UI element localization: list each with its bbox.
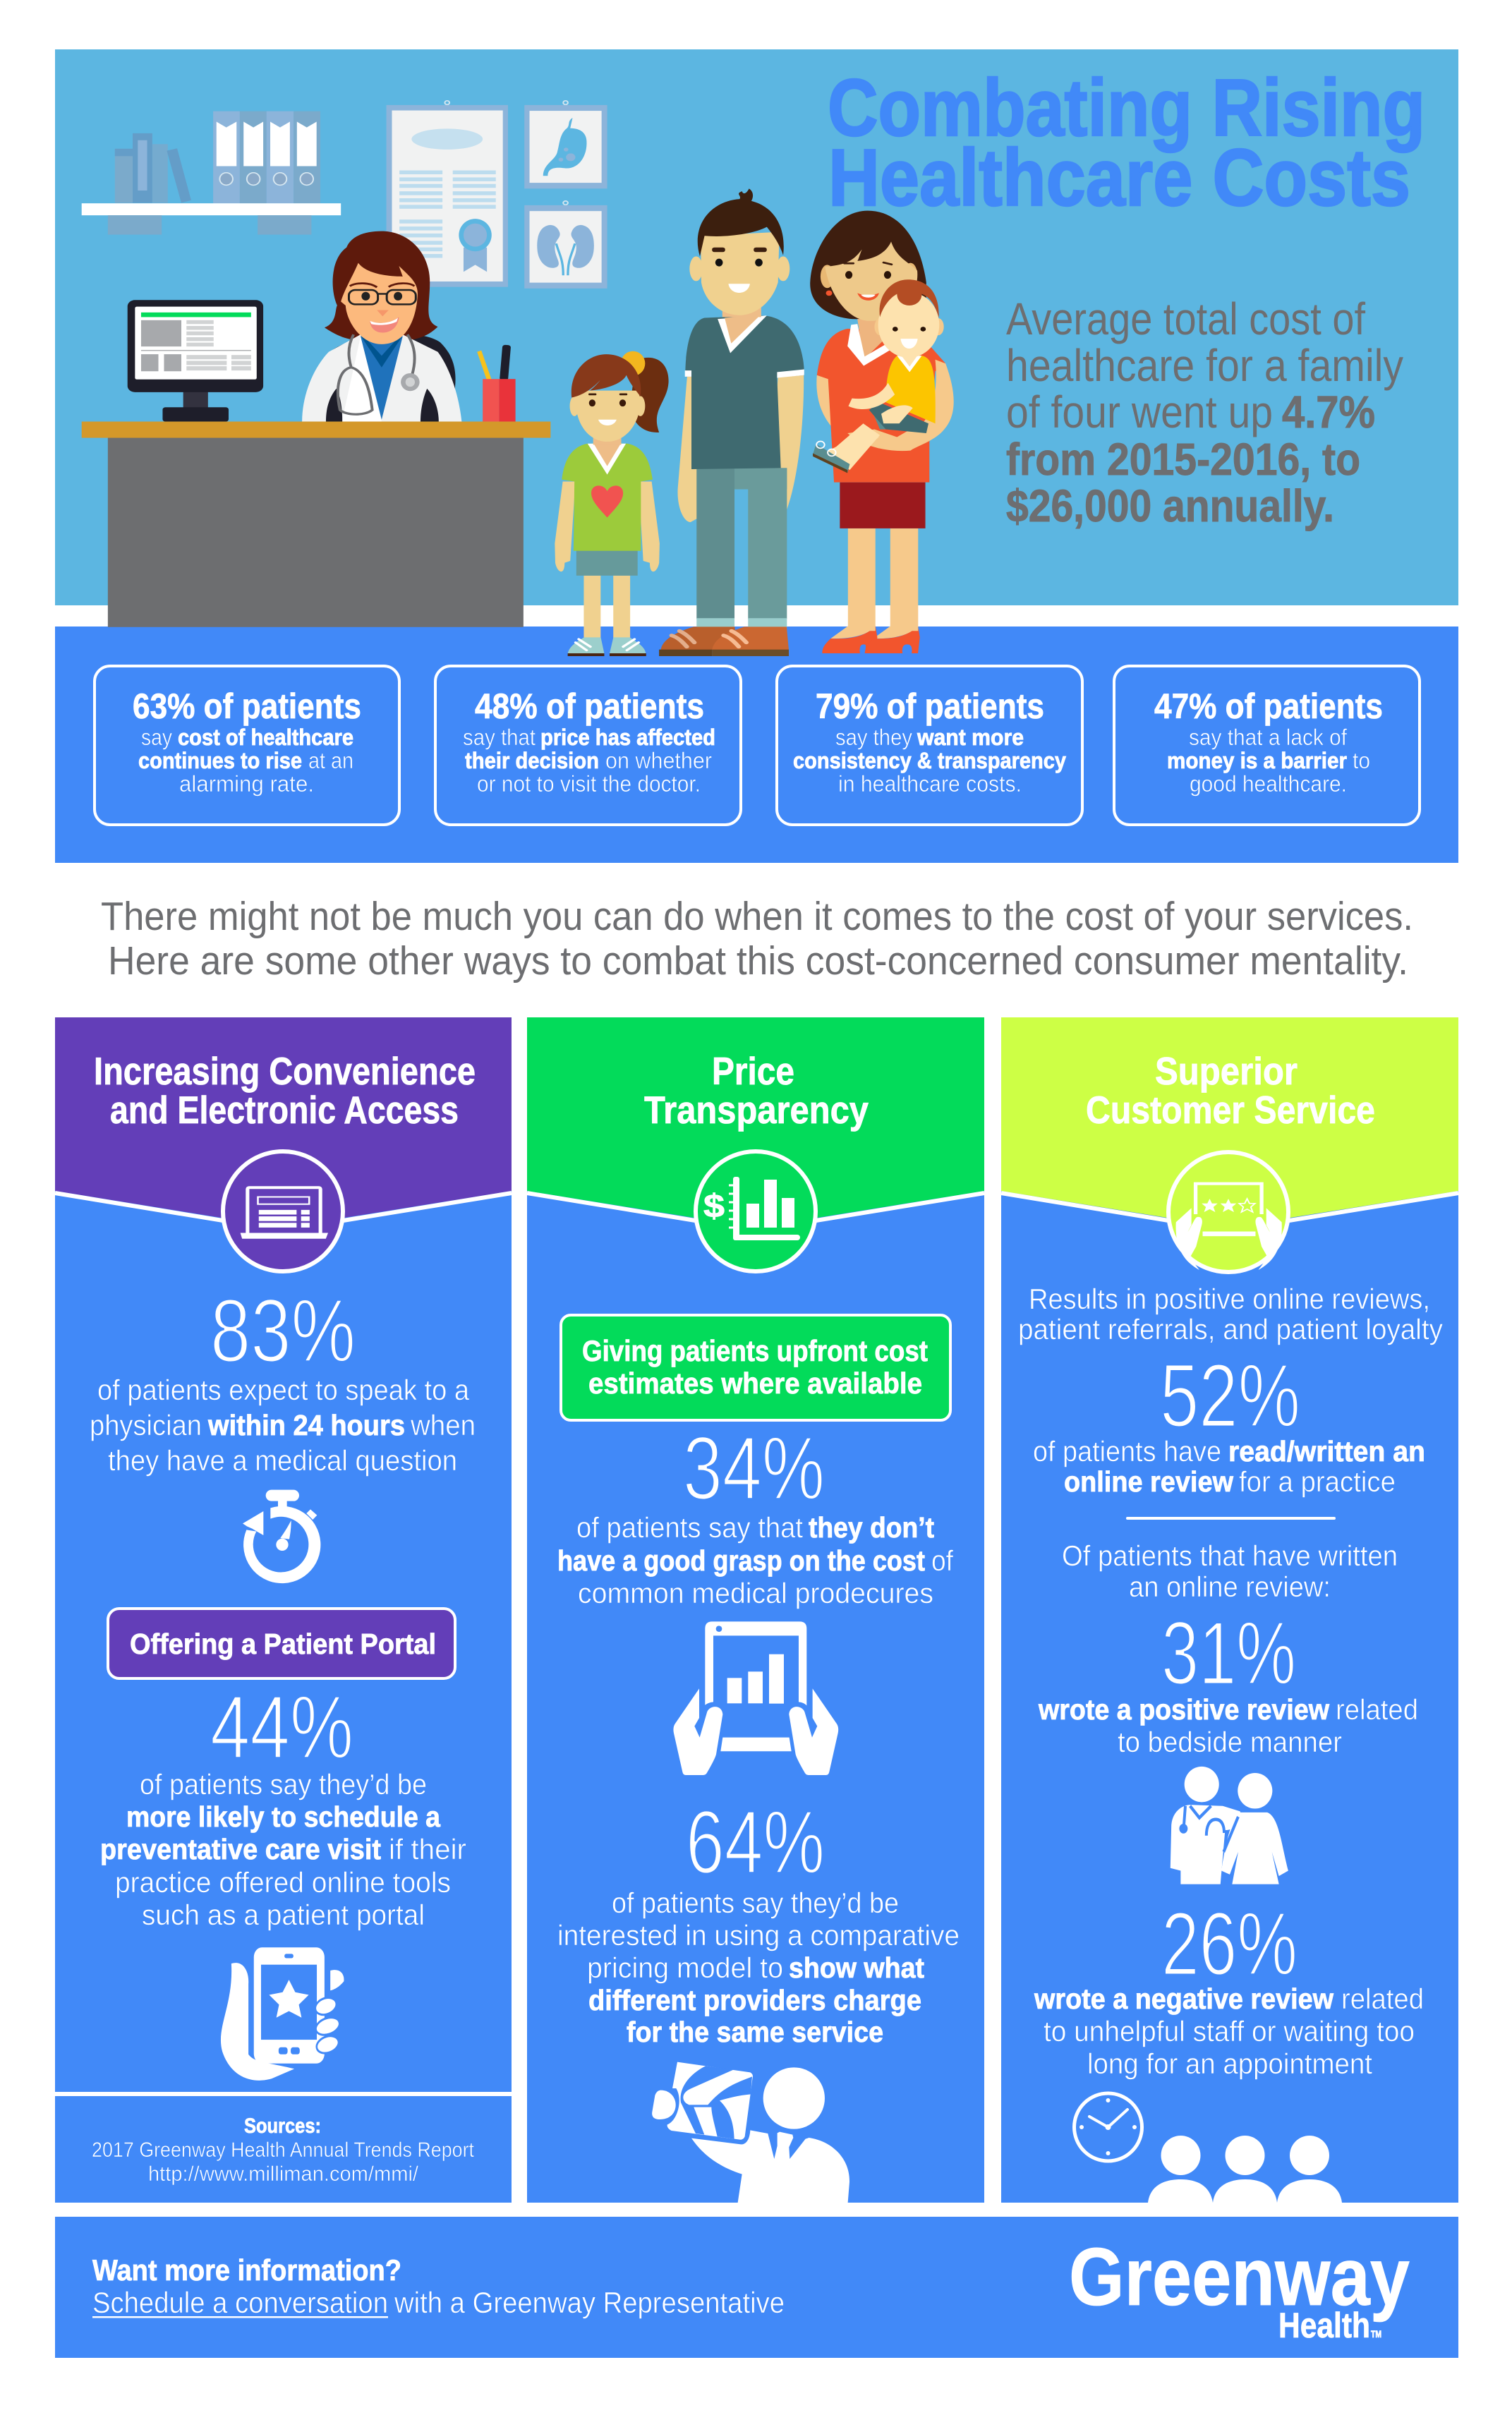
shelf	[82, 203, 341, 235]
callout: 63% of patients: continues to rise	[138, 748, 302, 773]
illustration: shoes and feet	[568, 626, 920, 656]
icon: books on shelf	[115, 133, 191, 203]
text block: 52% description	[1033, 1435, 1425, 1498]
icon: hands holding tablet with star rating	[1168, 1152, 1288, 1272]
subheading box: upfront cost estimates: estimates where available	[588, 1367, 922, 1400]
text block: call to action: Schedule a conversation	[92, 2286, 388, 2319]
text block: call to action	[92, 2253, 785, 2319]
icon: binders on shelf	[213, 111, 320, 203]
text block: 34% description: they don’t	[809, 1511, 934, 1544]
text block: 44% description: practice offered online tools	[115, 1866, 451, 1899]
text block: 52% description: read/written an	[1228, 1435, 1425, 1467]
callout: 63% of patients: say	[141, 725, 172, 750]
text block: 34% description	[557, 1511, 954, 1609]
text block: introduction: There might not be much you can do when it comes to the cost of your services.	[101, 894, 1413, 939]
subheading box: patient portal: Offering a Patient Portal	[130, 1628, 436, 1660]
heading: Price	[712, 1049, 794, 1093]
text block: average cost statement: of four went up	[1006, 387, 1273, 437]
logo: Greenway Health: Health	[1278, 2306, 1370, 2345]
title	[828, 63, 1425, 223]
callout: 47% of patients: to	[1353, 748, 1370, 773]
column header: green	[527, 1017, 984, 1228]
panel: statistics band	[55, 627, 1458, 863]
column header: lime	[1001, 1017, 1458, 1228]
heading	[644, 1049, 869, 1132]
text block: sources: 2017 Greenway Health Annual Trends Report	[92, 2138, 475, 2162]
panel: hero scene background	[55, 49, 1458, 627]
callout: 48% of patients: say that	[463, 725, 536, 750]
callout: 47% of patients: good healthcare.	[1190, 771, 1347, 797]
desk	[82, 422, 550, 627]
text block: 64% description: pricing model to	[587, 1951, 783, 1984]
icon: price chart in circle: $	[703, 1187, 725, 1224]
title: Combating Rising	[828, 63, 1425, 153]
panel: superior customer service column	[1001, 1017, 1458, 2203]
stat: 31%: 31%	[1161, 1603, 1296, 1703]
icon: three waiting people	[1148, 2136, 1342, 2203]
callout: 79% of patients: say they	[835, 725, 912, 750]
icon: pen cup	[477, 345, 516, 422]
icon: stopwatch	[243, 1490, 320, 1583]
panel: increasing convenience column	[55, 1017, 512, 2203]
text block: sources	[55, 2092, 512, 2186]
text block: results intro	[1018, 1283, 1443, 1345]
heading	[94, 1049, 476, 1132]
callout: 63% of patients: cost of healthcare	[178, 725, 353, 750]
text block: 52% description: of patients have	[1033, 1435, 1221, 1467]
callout: 47% of patients: say that a lack of	[1189, 725, 1347, 750]
callout: 48% of patients: or not to visit the doctor.	[477, 771, 701, 797]
callout: 79% of patients	[777, 666, 1082, 825]
stat: 83%: 83%	[210, 1281, 356, 1381]
icon: framed kidney chart	[524, 201, 607, 289]
subheading box: upfront cost estimates	[561, 1315, 950, 1420]
text block: 44% description: such as a patient portal	[142, 1899, 425, 1931]
text block: 26% description: wrote a negative review	[1034, 1983, 1333, 2015]
text block: 31% description: wrote a positive review	[1038, 1693, 1329, 1726]
title: Healthcare Costs	[828, 133, 1410, 223]
stat: 34%: 34%	[683, 1418, 825, 1518]
stat: 26%: 26%	[1161, 1894, 1298, 1994]
text block: sources: Sources:	[244, 2114, 321, 2138]
text block: 83% description: of patients expect to speak to a	[97, 1374, 469, 1406]
icon: mother's heels	[822, 626, 920, 653]
callout: 79% of patients: 79% of patients	[816, 686, 1044, 726]
heading: Increasing Convenience	[94, 1049, 476, 1093]
callout: 48% of patients: on whether	[605, 748, 712, 773]
icon: doctor and patient	[1171, 1767, 1288, 1884]
text block: 26% description: related	[1341, 1983, 1424, 2015]
text block: 52% description: for a practice	[1239, 1465, 1396, 1498]
panel: price transparency column	[527, 1017, 984, 2203]
text block: written review intro	[1062, 1539, 1398, 1603]
subheading box: upfront cost estimates: Giving patients upfront cost	[582, 1334, 928, 1367]
text block: 31% description: to bedside manner	[1118, 1726, 1342, 1758]
text block: written review intro: Of patients that have written	[1062, 1539, 1398, 1572]
heading: Customer Service	[1086, 1088, 1375, 1132]
text block: average cost statement: $26,000 annually.	[1006, 480, 1334, 531]
text block: average cost statement: 4.7%	[1282, 387, 1375, 437]
text block: average cost statement: from 2015-2016, to	[1006, 434, 1360, 485]
illustration: mother holding baby	[810, 211, 954, 631]
illustration: baby	[813, 279, 944, 473]
panel: footer	[55, 2217, 1458, 2358]
callout: 79% of patients: in healthcare costs.	[838, 771, 1022, 797]
text block: call to action: Want more information?	[92, 2253, 401, 2287]
stat: 64%: 64%	[686, 1792, 825, 1892]
text block: 64% description: for the same service	[627, 2016, 883, 2048]
callout: 47% of patients: money is a barrier	[1167, 748, 1347, 773]
text block: results intro: patient referrals, and patient loyalty	[1018, 1313, 1443, 1345]
callout: 79% of patients: want more	[917, 725, 1024, 750]
icon: price chart in circle	[696, 1151, 816, 1271]
text block: average cost statement: Average total cost of	[1006, 293, 1365, 344]
text block: 44% description: if their	[389, 1833, 466, 1865]
text block: 26% description: to unhelpful staff or waiting too	[1044, 2015, 1415, 2047]
icon: clock	[1074, 2093, 1142, 2161]
text block: 44% description: more likely to schedule a	[126, 1800, 441, 1833]
subheading box: patient portal	[108, 1609, 455, 1678]
icon: girl's sneakers	[568, 637, 646, 656]
icon: person looking at x-ray	[651, 2062, 849, 2203]
callout: 63% of patients: alarming rate.	[179, 771, 314, 797]
text block: call to action: with a Greenway Representative	[394, 2286, 785, 2319]
text block: 83% description: when	[410, 1409, 476, 1441]
icon: laptop in circle	[223, 1151, 343, 1271]
text block: 34% description: of	[931, 1544, 954, 1577]
text block: 64% description	[557, 1887, 960, 2048]
text block: results intro: Results in positive online reviews,	[1029, 1283, 1430, 1315]
heading: Superior	[1155, 1049, 1298, 1093]
text block: 64% description: interested in using a comparative	[557, 1919, 960, 1951]
text block: 26% description	[1034, 1983, 1424, 2080]
icon: computer monitor	[128, 300, 263, 422]
icon: hands holding tablet with chart	[673, 1621, 838, 1775]
text block: 83% description: they have a medical question	[108, 1444, 457, 1477]
callout: 48% of patients	[435, 666, 741, 825]
text block: average cost statement: healthcare for a family	[1006, 340, 1403, 391]
icon: hand holding phone	[221, 1947, 344, 2081]
text block: 83% description	[90, 1374, 476, 1477]
heading: and Electronic Access	[110, 1088, 459, 1132]
text block: 64% description: different providers charge	[588, 1984, 921, 2016]
callout: 63% of patients: at an	[308, 748, 353, 773]
text block: sources: http://www.milliman.com/mmi/	[148, 2162, 419, 2186]
illustration: doctor	[302, 231, 461, 422]
text block: 31% description: related	[1336, 1693, 1418, 1726]
text block: 83% description: within 24 hours	[207, 1409, 405, 1441]
icon: father's shoes	[659, 627, 789, 656]
callout: 63% of patients	[95, 666, 399, 825]
text block: 31% description	[1038, 1693, 1418, 1758]
illustration: office wall and doctor at desk	[82, 101, 804, 653]
text block: 44% description: preventative care visit	[100, 1833, 381, 1865]
text block: 34% description: of patients say that	[576, 1511, 804, 1544]
text block: 44% description: of patients say they’d be	[140, 1768, 427, 1800]
text block: 26% description: long for an appointment	[1087, 2047, 1373, 2080]
icon: framed stomach chart	[524, 101, 607, 188]
text block: introduction	[101, 894, 1413, 983]
text block: written review intro: an online review:	[1129, 1570, 1331, 1603]
callout: 48% of patients: their decision	[465, 748, 599, 773]
text block: 44% description	[100, 1768, 466, 1931]
callout: 47% of patients	[1114, 666, 1420, 825]
heading: Transparency	[644, 1088, 869, 1132]
logo: Greenway Health: TM	[1371, 2328, 1381, 2340]
stat: 44%: 44%	[210, 1677, 353, 1777]
text block: 64% description: of patients say they’d be	[612, 1887, 899, 1919]
text block: 34% description: common medical prodecures	[578, 1577, 933, 1609]
stat: 52%: 52%	[1160, 1345, 1300, 1446]
heading	[1086, 1049, 1375, 1132]
column header: purple	[55, 1017, 512, 1228]
callout: 47% of patients: 47% of patients	[1154, 686, 1383, 726]
text block: 83% description: physician	[90, 1409, 202, 1441]
callout: 63% of patients: 63% of patients	[133, 686, 361, 726]
text block: introduction: Here are some other ways to combat this cost-concerned consumer mentality.	[108, 938, 1408, 983]
icon: framed certificate	[387, 101, 508, 287]
text block: average cost statement	[1006, 293, 1403, 531]
text block: 52% description: online review	[1064, 1465, 1233, 1498]
text block: 34% description: have a good grasp on the cost	[557, 1544, 925, 1577]
illustration: father	[678, 188, 804, 627]
logo: Greenway Health: Greenway	[1069, 2231, 1410, 2323]
illustration: girl	[555, 351, 669, 653]
callout: 79% of patients: consistency & transparency	[793, 748, 1066, 773]
callout: 48% of patients: 48% of patients	[475, 686, 704, 726]
text block: 64% description: show what	[789, 1951, 924, 1984]
callout: 48% of patients: price has affected	[540, 725, 715, 750]
